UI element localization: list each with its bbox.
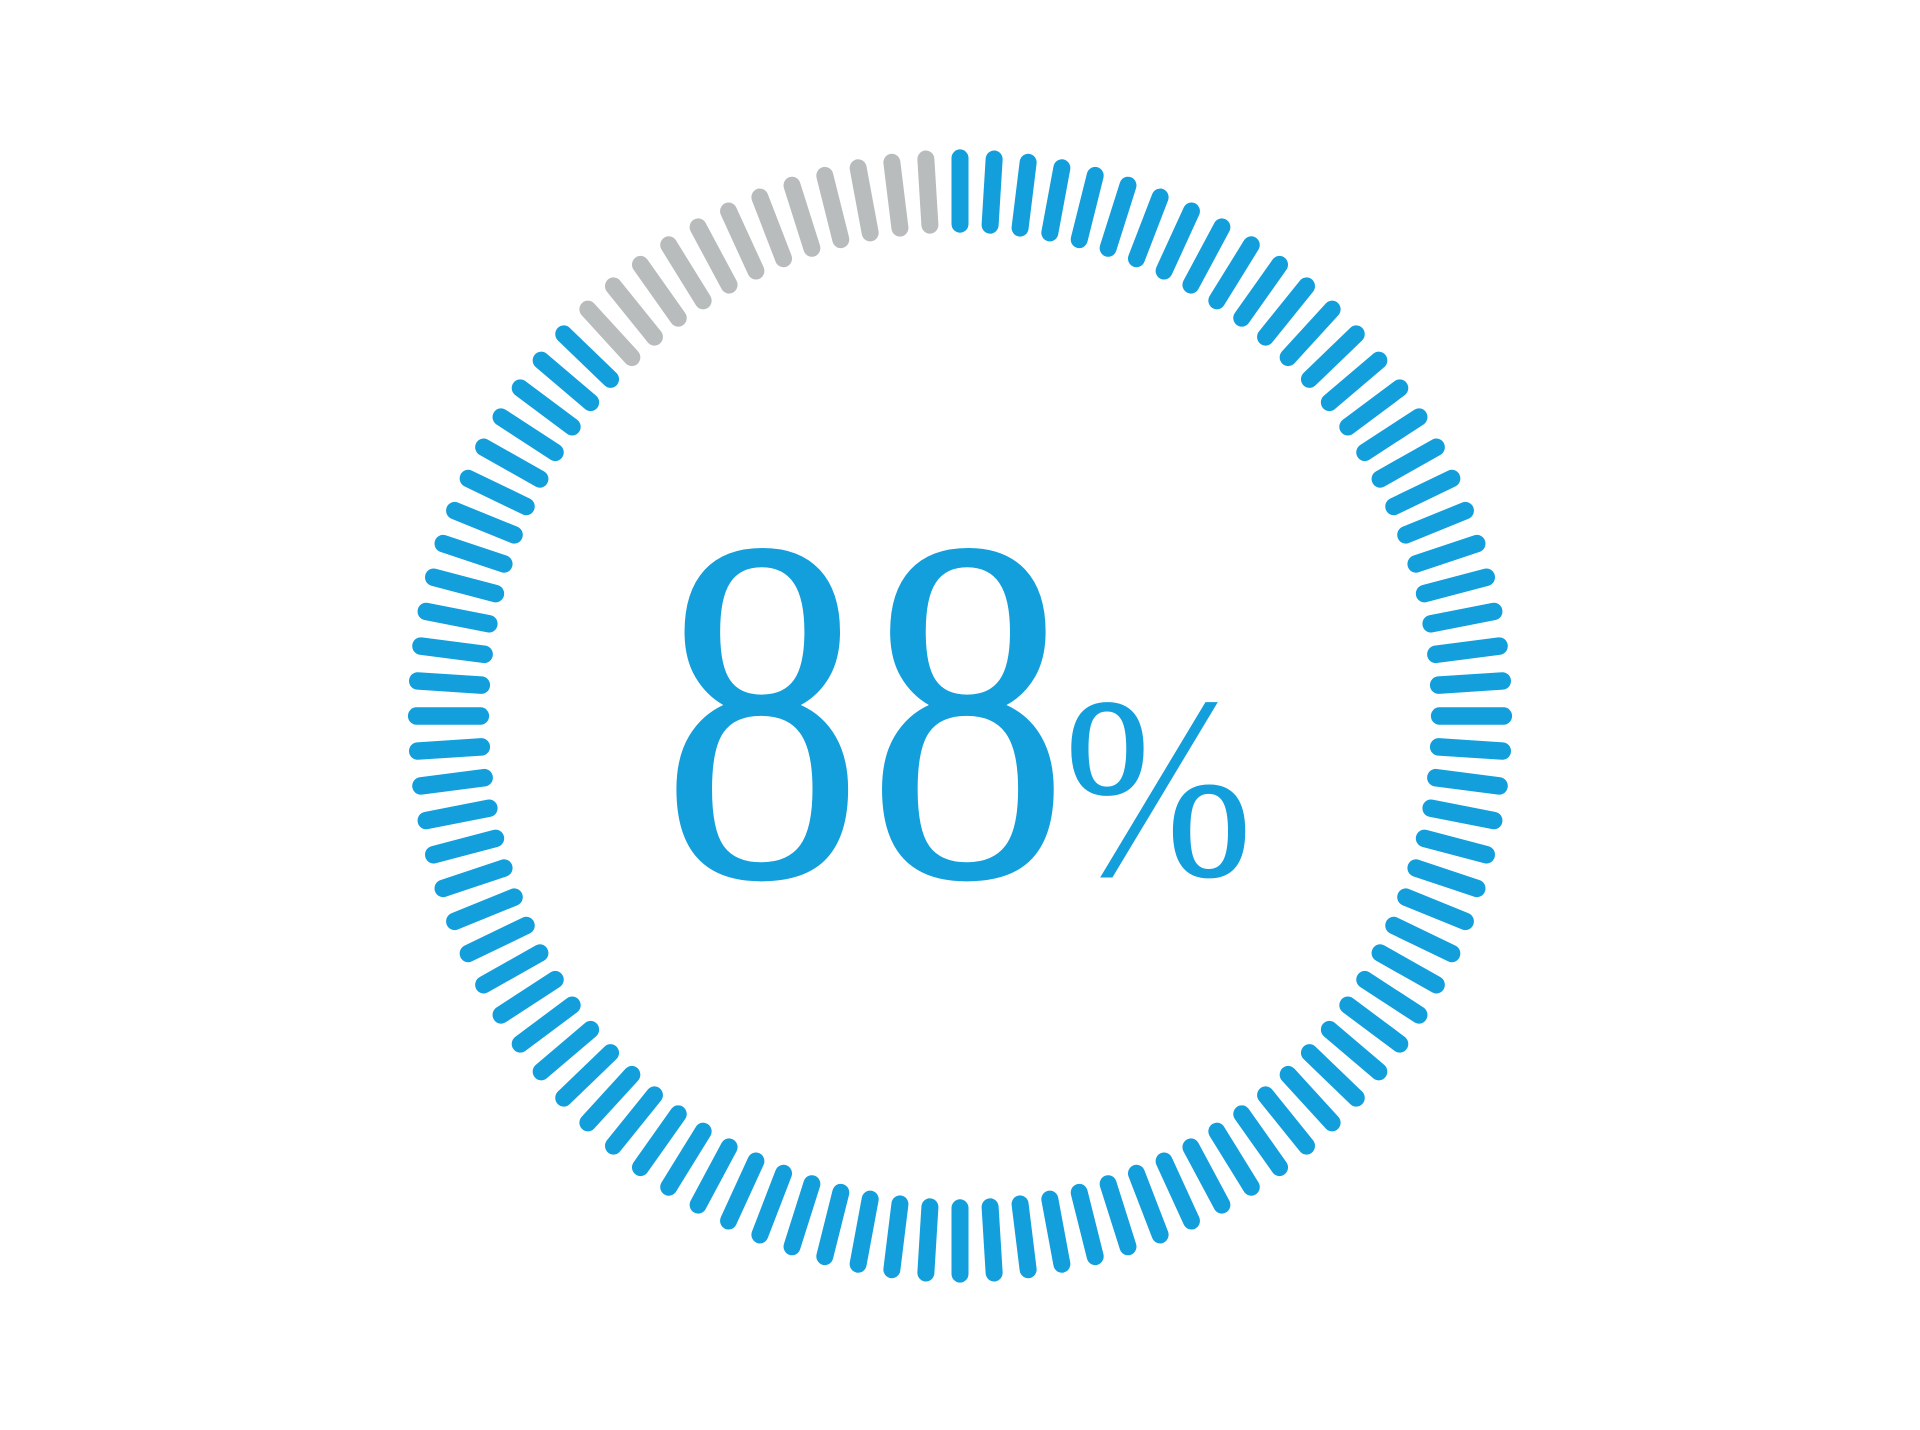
percent sign: % bbox=[1064, 643, 1253, 931]
numeral: second 8: 8 bbox=[867, 436, 1069, 984]
gauge ring: blue ticks (88 of 100) bbox=[416, 158, 1504, 1274]
numeral: first 8: 8 bbox=[661, 436, 864, 984]
gauge ring: grey ticks (remaining 12 of 100) bbox=[588, 159, 930, 357]
big number: 88 percent bbox=[661, 436, 1253, 984]
